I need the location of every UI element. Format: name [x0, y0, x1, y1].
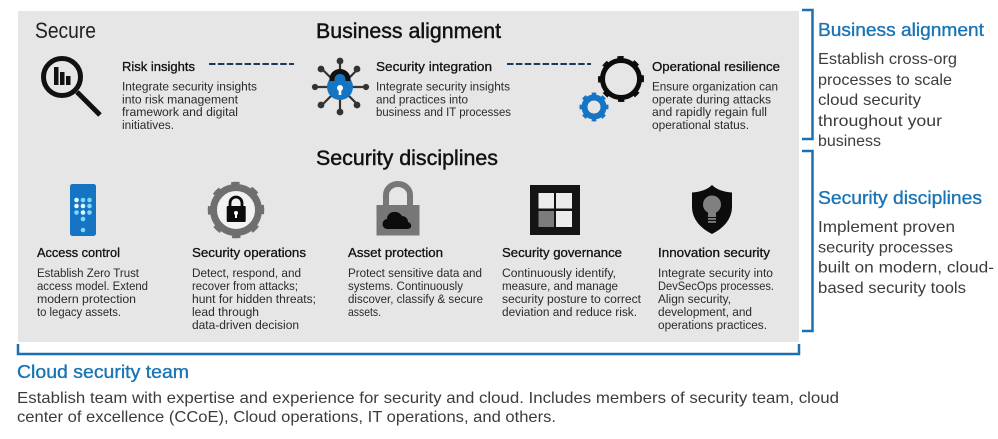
- item: Access control: [37, 184, 148, 319]
- text block: DevSecOps processes.: [658, 279, 774, 293]
- text block: security posture to correct: [502, 292, 642, 306]
- text block: modern protection: [37, 292, 136, 306]
- icon: networked padlock: [313, 59, 368, 114]
- text block: operations practices.: [658, 318, 767, 332]
- text block: [17, 390, 839, 426]
- text block: [348, 266, 483, 319]
- item: Innovation security: [658, 185, 774, 332]
- heading: Cloud security team: [17, 362, 189, 382]
- text block: processes to scale: [818, 72, 952, 89]
- bracket: cloud security team: [18, 344, 799, 354]
- connector: dashed line 1: [209, 63, 294, 65]
- text block: business and IT processes: [376, 105, 511, 119]
- text block: data-driven decision: [192, 318, 299, 332]
- text block: Establish Zero Trust: [37, 266, 140, 280]
- heading: Security integration: [376, 59, 492, 74]
- text block: center of excellence (CCoE), Cloud operations, IT operations, and others.: [17, 409, 556, 426]
- sidebar: Business alignment: [818, 20, 984, 150]
- text block: [818, 219, 994, 297]
- item: Security integration: [313, 59, 511, 119]
- text block: Protect sensitive data and: [348, 266, 482, 280]
- connector: dashed line 2: [507, 63, 591, 65]
- bracket: business alignment: [802, 10, 812, 139]
- sidebar: Security disciplines: [818, 188, 994, 297]
- heading: Security operations: [192, 245, 306, 260]
- heading: Asset protection: [348, 245, 443, 260]
- text block: and rapidly regain full: [652, 105, 767, 119]
- text block: framework and digital: [122, 105, 238, 119]
- text block: and practices into: [376, 92, 468, 106]
- bracket: security disciplines: [802, 151, 812, 331]
- heading: Risk insights: [122, 59, 195, 74]
- text block: [658, 266, 774, 332]
- text block: access model. Extend: [37, 279, 148, 293]
- text block: Integrate security insights: [122, 80, 257, 94]
- item: Risk insights: [44, 58, 257, 132]
- icon: gear with padlock: [210, 184, 262, 236]
- text block: [122, 80, 257, 132]
- text block: built on modern, cloud-: [818, 260, 994, 276]
- heading: Operational resilience: [652, 59, 780, 74]
- heading: Security disciplines: [818, 188, 982, 208]
- text block: [37, 266, 148, 319]
- icon: black and blue gears: [581, 58, 642, 120]
- icon: padlock with cloud: [376, 184, 420, 236]
- footer: Cloud security team: [17, 362, 839, 426]
- text block: operational status.: [652, 118, 749, 132]
- item: Security operations: [192, 184, 316, 332]
- text block: [818, 51, 957, 150]
- text block: Ensure organization can: [652, 80, 778, 94]
- text block: deviation and reduce risk.: [502, 305, 637, 319]
- icon: magnifier with bar chart: [44, 58, 100, 115]
- heading: Security governance: [502, 245, 622, 260]
- text block: Implement proven: [818, 219, 955, 236]
- text block: discover, classify & secure: [348, 292, 483, 306]
- text block: [192, 266, 316, 332]
- text block: operate during attacks: [652, 92, 771, 106]
- text block: cloud security: [818, 92, 921, 109]
- heading: Access control: [37, 245, 120, 260]
- text block: based security tools: [818, 280, 966, 297]
- text block: Detect, respond, and: [192, 266, 301, 280]
- heading: Secure: Secure: [35, 18, 96, 43]
- text block: initiatives.: [122, 118, 174, 132]
- text block: measure, and manage: [502, 279, 618, 293]
- text block: development, and: [658, 305, 752, 319]
- heading: Business alignment: [818, 20, 984, 40]
- text block: Continuously identify,: [502, 266, 616, 280]
- text block: to legacy assets.: [37, 305, 121, 319]
- text block: throughout your: [818, 113, 943, 130]
- text block: Integrate security insights: [376, 80, 510, 94]
- text block: recover from attacks;: [192, 279, 298, 293]
- text block: [376, 80, 511, 119]
- text block: lead through: [192, 305, 259, 319]
- item: Security governance: [502, 185, 642, 319]
- icon: four-pane window: [530, 185, 580, 235]
- text block: assets.: [348, 305, 381, 319]
- item: Asset protection: [348, 184, 483, 319]
- text block: Integrate security into: [658, 266, 773, 280]
- text block: [502, 266, 642, 319]
- heading: Innovation security: [658, 245, 770, 260]
- text block: systems. Continuously: [348, 279, 464, 293]
- text block: Align security,: [658, 292, 731, 306]
- text block: business: [818, 133, 881, 150]
- text block: security processes: [818, 240, 953, 256]
- icon: shield with light bulb: [692, 185, 732, 234]
- text block: into risk management: [122, 92, 239, 106]
- item: Operational resilience: [581, 58, 780, 132]
- panel: grey background: [18, 11, 799, 342]
- text block: [652, 80, 778, 132]
- heading: Business alignment: Business alignment: [316, 19, 501, 43]
- text block: Establish cross-org: [818, 51, 957, 68]
- text block: hunt for hidden threats;: [192, 292, 316, 306]
- text block: Establish team with expertise and experience for security and cloud. Includes members of security team, cloud: [17, 390, 839, 407]
- heading: Security disciplines: Security disciplines: [316, 146, 498, 170]
- icon: phone keypad: [70, 184, 96, 236]
